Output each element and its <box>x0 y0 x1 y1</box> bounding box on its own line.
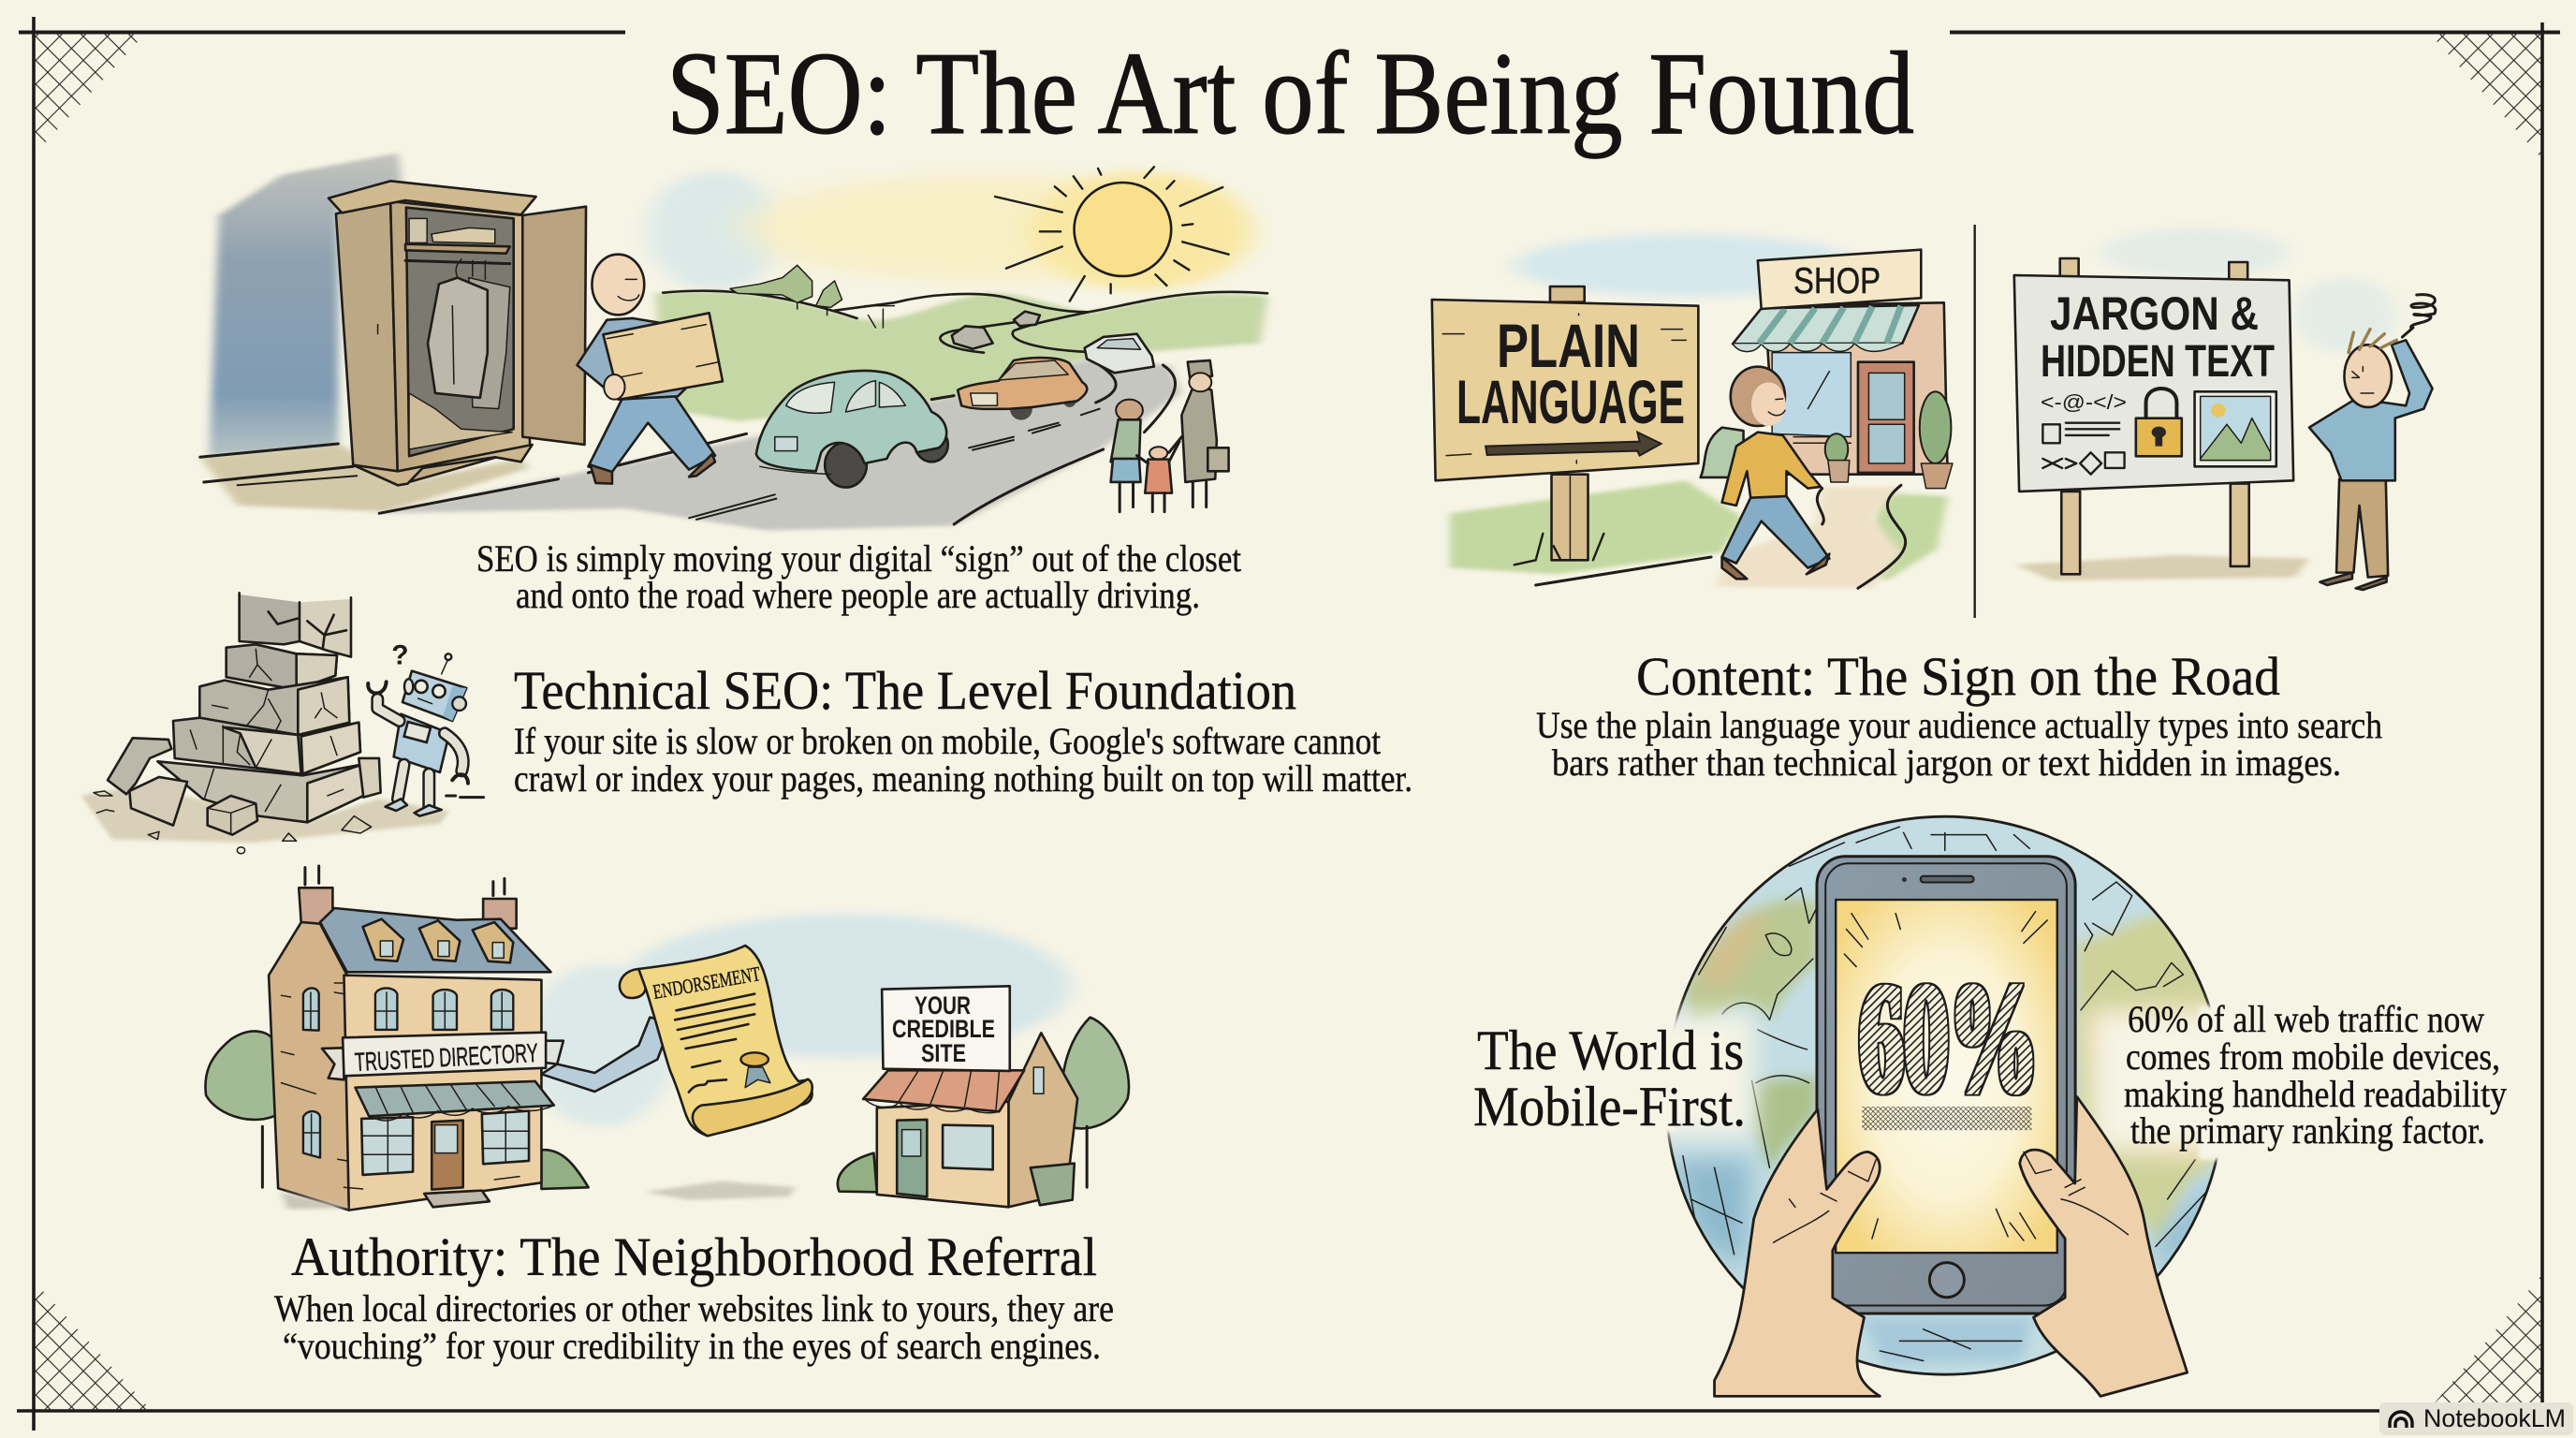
icon: distant cars <box>952 312 1040 349</box>
sign text: plain language <box>1456 311 1685 436</box>
sign: your credible site: SITE <box>921 1039 966 1067</box>
statistic: 60% on phone screen: 60% <box>1859 955 2039 1123</box>
icon: globe <box>1666 816 2231 1374</box>
block: technical SEO: If your site is slow or broken on mobile, Google's software cannot <box>514 720 1381 762</box>
sign text: jargon and hidden text: <-@-</> <box>2041 390 2127 414</box>
icon: your credible site shop <box>838 986 1129 1207</box>
text: mobile traffic statistic <box>2124 998 2507 1152</box>
text: mobile traffic statistic: 60% of all web traffic now <box>2128 998 2484 1040</box>
icon: walking woman <box>1722 367 1829 579</box>
sign text: shop: SHOP <box>1793 261 1881 301</box>
sign: your credible site: YOUR <box>915 991 971 1020</box>
banner: trusted directory: TRUSTED DIRECTORY <box>354 1038 539 1077</box>
icon: orange car <box>958 358 1087 420</box>
badge: NotebookLM <box>2379 1402 2573 1435</box>
sign text: plain language: LANGUAGE <box>1456 367 1685 436</box>
heading: technical SEO: Technical SEO: The Level Foundation <box>514 660 1296 721</box>
icon: hillside trees <box>730 265 894 328</box>
icon: endorsement scroll <box>620 946 812 1136</box>
heading: the world is mobile-first: Mobile-First. <box>1473 1076 1746 1137</box>
icon: jargon billboard <box>2014 258 2293 574</box>
heading: content: Content: The Sign on the Road <box>1636 646 2280 707</box>
block: authority: When local directories or other websites link to yours, they are <box>274 1287 1114 1329</box>
icon: open wardrobe <box>329 181 586 485</box>
text: mobile traffic statistic: making handheld readability <box>2124 1073 2507 1115</box>
icon: robot <box>368 639 484 816</box>
icon: tree left <box>205 1031 589 1189</box>
banner: trusted directory <box>322 1033 564 1079</box>
icon: smartphone <box>1817 857 2075 1313</box>
icon: trusted directory building <box>269 866 671 1211</box>
icon: man carrying the sign <box>577 255 723 484</box>
icon: confused man <box>2309 295 2436 590</box>
icon: wooden plain language sign <box>1432 286 1698 565</box>
sign text: jargon and hidden text: JARGON & <box>2050 287 2259 340</box>
caption: closet to the road: and onto the road where people are actually driving. <box>516 574 1200 616</box>
badge: NotebookLM: NotebookLM <box>2423 1404 2566 1432</box>
block: authority <box>274 1226 1114 1367</box>
divider <box>1973 225 1976 618</box>
illustration: globe, phone and hands <box>1666 814 2218 1398</box>
block: technical SEO <box>514 660 1412 800</box>
illustration: moving the sign out of the closet onto the road <box>200 153 1267 531</box>
heading: the world is mobile-first <box>1473 1020 1746 1137</box>
icon: shop front <box>1701 250 1953 489</box>
column stones <box>94 593 381 854</box>
icon: robot: ? <box>391 639 409 670</box>
block: content: Use the plain language your audience actually types into search <box>1536 704 2382 746</box>
sign text: plain language: PLAIN <box>1497 311 1640 380</box>
icon: left hand <box>1715 1109 1880 1396</box>
block: authority: “vouching” for your credibility in the eyes of search engines. <box>283 1325 1101 1367</box>
illustration: directory referral to your site <box>205 866 1129 1211</box>
caption: closet to the road <box>476 537 1241 616</box>
sign text: jargon and hidden text <box>2041 287 2275 414</box>
icon: family on the roadside <box>1111 360 1229 512</box>
heading: the world is mobile-first: The World is <box>1477 1020 1744 1081</box>
heading: authority: Authority: The Neighborhood Referral <box>291 1226 1097 1287</box>
sign: your credible site: CREDIBLE <box>892 1015 995 1043</box>
sign: your credible site <box>892 991 995 1067</box>
text: mobile traffic statistic: comes from mobile devices, <box>2126 1035 2500 1078</box>
block: technical SEO: crawl or index your pages, meaning nothing built on top will matter. <box>514 757 1412 800</box>
illustration: plain language sign versus jargon sign <box>1432 225 2436 618</box>
icon: white car <box>1085 334 1154 373</box>
icon: sun <box>995 167 1229 301</box>
block: content: bars rather than technical jargon or text hidden in images. <box>1552 741 2341 784</box>
icon: green beetle car <box>756 371 948 488</box>
illustration: cracked foundation and confused robot <box>81 593 484 854</box>
caption: closet to the road: SEO is simply moving your digital “sign” out of the closet <box>476 537 1241 580</box>
label: endorsement: ENDORSEMENT <box>651 961 762 1004</box>
text: mobile traffic statistic: the primary ranking factor. <box>2130 1109 2485 1152</box>
sign text: jargon and hidden text: HIDDEN TEXT <box>2041 337 2275 387</box>
icon: right hand <box>2020 1096 2188 1396</box>
block: content <box>1536 646 2382 784</box>
title: SEO: The Art of Being Found <box>666 29 1914 159</box>
